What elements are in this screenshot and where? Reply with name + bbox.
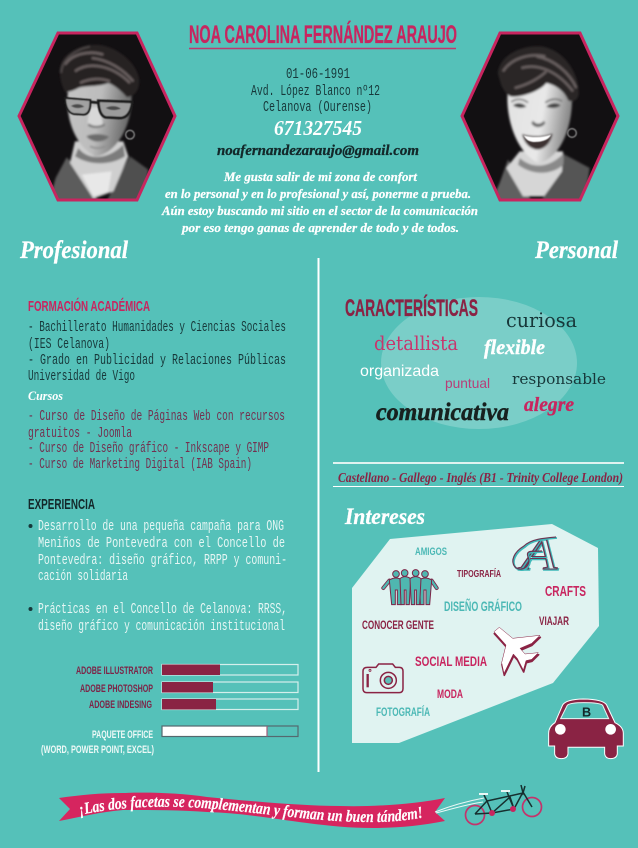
word: organizada: organizada bbox=[360, 363, 439, 380]
word: alegre: alegre bbox=[524, 394, 574, 416]
bar: illustrator: ADOBE ILLUSTRATOR bbox=[76, 665, 153, 677]
text: studies bbox=[28, 320, 286, 385]
word: curiosa: curiosa bbox=[506, 308, 577, 332]
icon: airplane bbox=[494, 627, 540, 675]
text: courses: - Curso de Diseño de Páginas Web con recursos bbox=[28, 409, 285, 425]
phone: 671327545 bbox=[274, 116, 362, 140]
icon: letter A: A bbox=[518, 529, 559, 580]
header: name and contact bbox=[189, 20, 457, 159]
text: experience two: diseño gráfico y comunicación institucional bbox=[38, 619, 285, 635]
town line: Celanova (Ourense) bbox=[263, 100, 372, 116]
intro paragraph: Me gusta salir de mi zona de confort bbox=[223, 169, 417, 184]
heading: Personal: Personal bbox=[534, 237, 618, 264]
bar: office: PAQUETE OFFICE bbox=[92, 729, 153, 741]
text: experience one: Pontevedra: diseño gráfico, RRPP y comuni- bbox=[38, 553, 287, 569]
icon: letter A: A bbox=[517, 528, 558, 579]
intro paragraph: por eso tengo ganas de aprender de todo y de todos. bbox=[181, 220, 459, 235]
heading: Profesional: Profesional bbox=[19, 237, 128, 264]
icon: car with B sign bbox=[549, 699, 623, 759]
text: studies: - Grado en Publicidad y Relaciones Públicas bbox=[28, 353, 286, 369]
bar: indesign bbox=[89, 699, 298, 711]
text: courses bbox=[28, 409, 285, 473]
bar: illustrator bbox=[76, 664, 298, 677]
chart: software skills bbox=[41, 664, 298, 756]
intro paragraph: en lo personal y en lo profesional y así, ponerme a prueba. bbox=[165, 186, 471, 201]
panel: intereses map bbox=[352, 524, 599, 743]
label: conocer gente: CONOCER GENTE bbox=[362, 618, 434, 632]
text: experience one: Meniños de Pontevedra con el Concello de bbox=[38, 536, 285, 552]
ellipse backdrop bbox=[381, 297, 577, 429]
icon: tandem bicycle bbox=[435, 785, 542, 824]
icon: camera bbox=[363, 664, 403, 693]
label: tipografía: TIPOGRAFÍA bbox=[457, 567, 501, 580]
label: viajar: VIAJAR bbox=[539, 616, 569, 628]
word: detallista: detallista bbox=[374, 331, 458, 355]
text: experience two: Prácticas en el Concello de Celanova: RRSS, bbox=[38, 602, 287, 618]
panel: experiencia bbox=[28, 496, 287, 635]
bar: photoshop bbox=[80, 682, 298, 695]
text: studies: (IES Celanova) bbox=[28, 337, 110, 353]
word: flexible: flexible bbox=[484, 335, 545, 359]
text: experience one bbox=[28, 519, 287, 585]
backdrop polygon bbox=[352, 524, 599, 743]
word: responsable: responsable bbox=[512, 370, 606, 388]
label: crafts: CRAFTS bbox=[545, 583, 586, 600]
intro paragraph bbox=[161, 169, 478, 235]
text: courses: gratuitos - Joomla bbox=[28, 426, 132, 442]
panel: formación académica bbox=[28, 297, 286, 473]
word: puntual: puntual bbox=[445, 375, 490, 391]
birth date: 01-06-1991 bbox=[286, 67, 350, 83]
label: moda: MODA bbox=[437, 687, 463, 701]
bar: photoshop: ADOBE PHOTOSHOP bbox=[80, 683, 153, 695]
icon: group of friends bbox=[383, 570, 437, 605]
heading: experiencia: EXPERIENCIA bbox=[28, 496, 95, 513]
photo: right portrait bbox=[458, 30, 623, 205]
text: experience one: cación solidaria bbox=[38, 569, 128, 585]
text: courses: - Curso de Marketing Digital (IAB Spain) bbox=[28, 457, 252, 473]
heading: características: CARACTERÍSTICAS bbox=[345, 294, 478, 322]
photo: left portrait bbox=[15, 30, 180, 205]
label: fotografía: FOTOGRAFÍA bbox=[376, 704, 430, 719]
bar: office bbox=[41, 726, 298, 756]
text: studies: Universidad de Vigo bbox=[28, 369, 135, 385]
word: comunicativa: comunicativa bbox=[376, 399, 509, 426]
icon: car with B sign: B bbox=[582, 706, 591, 720]
label: amigos: AMIGOS bbox=[415, 546, 447, 558]
banner: closing slogan: ¡Las dos facetas se complementan y forman un buen tándem! bbox=[80, 796, 422, 822]
text: experience one: Desarrollo de una pequeña campaña para ONG bbox=[38, 519, 284, 535]
label: social media: SOCIAL MEDIA bbox=[415, 653, 487, 669]
label: diseño gráfico: DISEÑO GRÁFICO bbox=[444, 597, 522, 614]
heading: intereses: Intereses bbox=[344, 504, 425, 529]
heading: formación: FORMACIÓN ACADÉMICA bbox=[28, 297, 150, 315]
text: courses: - Curso de Diseño gráfico - Inkscape y GIMP bbox=[28, 441, 269, 457]
icon: letter A bbox=[513, 528, 559, 580]
speed lines bbox=[435, 798, 484, 813]
text: experience two bbox=[28, 602, 287, 635]
bar: office: (WORD, POWER POINT, EXCEL) bbox=[41, 744, 154, 756]
email: noafernandezaraujo@gmail.com bbox=[217, 143, 419, 159]
text: studies: - Bachillerato Humanidades y Ciencias Sociales bbox=[28, 320, 286, 336]
heading: cursos: Cursos bbox=[28, 388, 63, 403]
intro paragraph: Aún estoy buscando mi sitio en el sector de la comunicación bbox=[161, 203, 478, 218]
bar: indesign: ADOBE INDESING bbox=[89, 699, 152, 711]
address line: Avd. López Blanco nº12 bbox=[251, 84, 380, 100]
panel: características word cloud bbox=[345, 294, 606, 429]
